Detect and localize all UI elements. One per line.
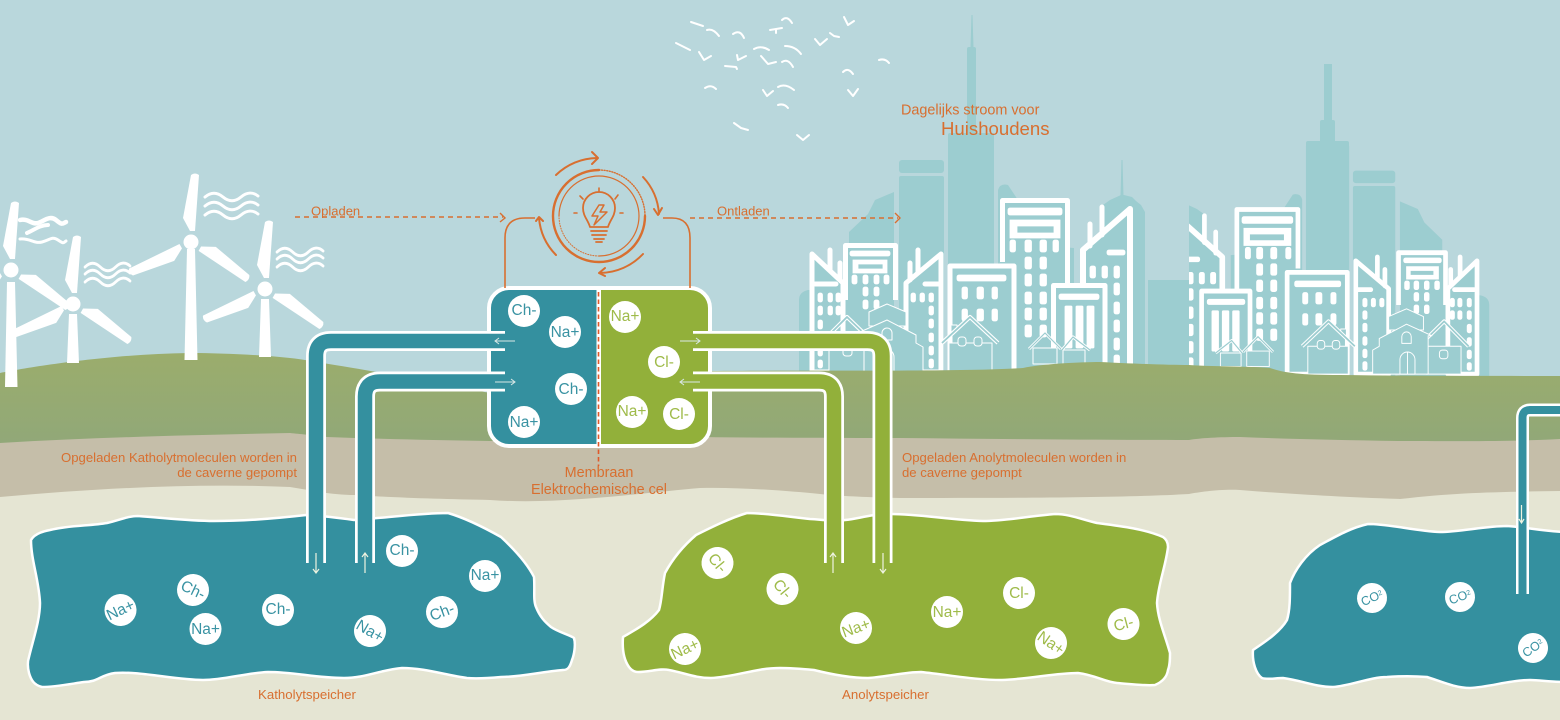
wind turbine 3 — [128, 174, 255, 360]
text: anolyte note — [902, 450, 1126, 480]
ions in cell: catholyte: Ch- — [512, 302, 536, 319]
katholyte cavern — [28, 513, 575, 687]
bird flock — [676, 17, 889, 140]
ions in katholyte cavern: Na+ — [353, 617, 387, 646]
arrow: opladen — [295, 213, 505, 222]
ions in katholyte cavern — [99, 535, 501, 653]
city right — [1189, 146, 1490, 376]
city left — [799, 133, 1208, 378]
ions in katholyte cavern: Na+ — [471, 567, 499, 584]
label: ontladen: Ontladen — [717, 204, 770, 218]
ions in katholyte cavern: Na+ — [191, 621, 220, 638]
ions in CO2 cavern: 2 — [1537, 638, 1544, 646]
membrane dashed line — [598, 292, 600, 466]
CO2 cavern — [1253, 524, 1560, 688]
ions in anolyte cavern — [664, 540, 1143, 670]
anolyte pipe inner — [693, 382, 834, 575]
ions in cell: anolyte: Cl- — [654, 354, 674, 371]
label: anolytspeicher: Anolytspeicher — [842, 687, 929, 702]
text: katholyte note: Opgeladen Katholytmoleculen worden in — [61, 450, 297, 465]
ions in CO2 cavern: 2 — [1377, 590, 1384, 598]
wind turbine 2 — [10, 236, 137, 363]
ions in CO2 cavern: CO — [1520, 638, 1543, 660]
anolyte pipe outer — [693, 341, 882, 575]
spire of right tower — [1121, 160, 1123, 196]
heading: households: Huishoudens — [941, 118, 1050, 139]
ions in CO2 cavern — [1352, 578, 1554, 669]
wind lines turbine 1 — [20, 218, 66, 243]
text: membrane — [531, 465, 667, 498]
wind turbine 1 — [0, 202, 75, 387]
ions in CO2 cavern: CO — [1447, 588, 1469, 607]
ions in cell: anolyte — [609, 301, 695, 430]
background skyline spire right — [1306, 64, 1349, 161]
ions in cell: anolyte: Cl- — [669, 406, 689, 423]
text: anolyte note: Opgeladen Anolytmoleculen worden in — [902, 450, 1126, 465]
ions in anolyte cavern: Cl- — [769, 576, 795, 602]
green hill — [0, 353, 1560, 443]
cream subsoil — [0, 480, 1560, 720]
ions in katholyte cavern: Ch- — [428, 600, 457, 625]
electrochemical cell — [489, 288, 710, 446]
ions in CO2 cavern: 2 — [1466, 589, 1472, 597]
wind lines turbine 3 — [205, 193, 258, 219]
text: katholyte note — [61, 450, 297, 480]
ions in cell: anolyte: Na+ — [618, 403, 646, 420]
ions in anolyte cavern: Na+ — [840, 616, 873, 641]
background skyline spire left — [967, 15, 976, 137]
ions in anolyte cavern: Cl- — [704, 550, 730, 576]
connector left — [505, 218, 535, 288]
ions in anolyte cavern: Na+ — [669, 636, 702, 663]
flow arrows in caverns — [313, 505, 1524, 573]
text: membrane: Elektrochemische cel — [531, 482, 667, 498]
label: opladen: Opladen — [311, 204, 360, 218]
ions in CO2 cavern: CO — [1359, 589, 1382, 609]
wind turbine 4 — [202, 220, 329, 357]
ions in katholyte cavern: Ch- — [266, 601, 290, 618]
arrow: ontladen — [690, 213, 900, 223]
label: katholytspeicher: Katholytspeicher — [258, 687, 357, 702]
text: katholyte note: de caverne gepompt — [177, 465, 297, 480]
text: membrane: Membraan — [565, 465, 633, 481]
ions in katholyte cavern: Ch- — [390, 542, 414, 559]
ions in anolyte cavern: Na+ — [933, 604, 961, 621]
wind lines turbine 4 — [277, 248, 323, 271]
catholyte pipe outer — [316, 341, 505, 575]
sand layer — [0, 430, 1560, 501]
ions in katholyte cavern: Na+ — [104, 597, 137, 624]
ions in cell: anolyte: Na+ — [611, 308, 639, 325]
ions in cell: catholyte: Ch- — [559, 381, 583, 398]
CO2 pipe — [1522, 410, 1560, 600]
ions in anolyte cavern: Cl- — [1009, 585, 1029, 602]
wind lines turbine 2 — [85, 263, 130, 286]
ions in anolyte cavern: Na+ — [1034, 628, 1067, 659]
ions in katholyte cavern: Ch- — [178, 577, 208, 603]
catholyte pipe inner — [365, 382, 505, 575]
connector right — [663, 218, 690, 288]
anolyte cavern — [623, 513, 1170, 685]
lightbulb icon with cycle — [536, 152, 662, 276]
heading: daily power: Dagelijks stroom voor — [901, 102, 1040, 118]
ions in cell: catholyte: Na+ — [510, 414, 538, 431]
ions in cell: catholyte: Na+ — [551, 324, 579, 341]
ions in cell: catholyte — [508, 295, 587, 438]
flow arrows in cell — [495, 338, 700, 385]
ions in anolyte cavern: Cl- — [1112, 614, 1135, 635]
text: anolyte note: de caverne gepompt — [902, 465, 1022, 480]
